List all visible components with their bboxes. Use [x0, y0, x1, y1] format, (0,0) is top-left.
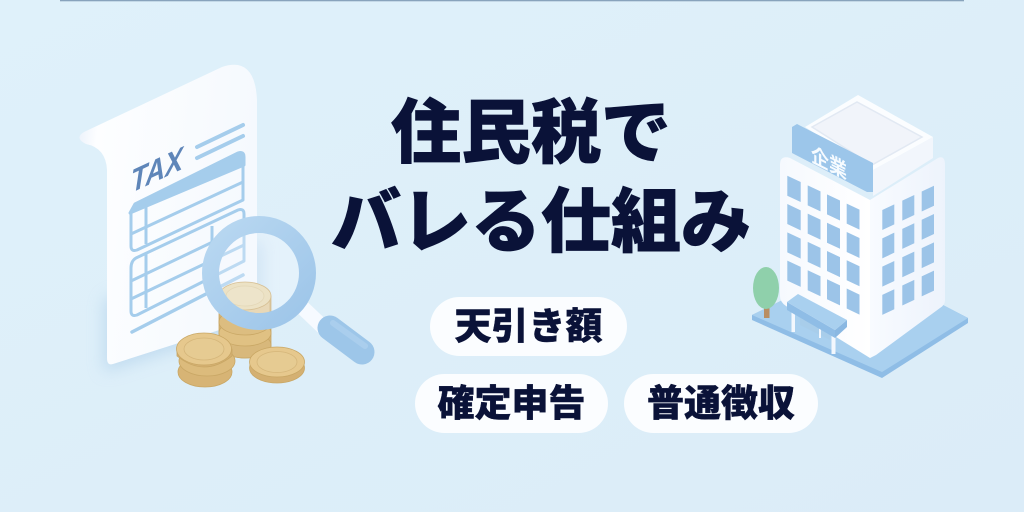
- keyword pill: 天引き額: [430, 297, 627, 356]
- left stack: [178, 357, 232, 387]
- left wall: [780, 157, 870, 358]
- tax document illustration: [79, 65, 262, 372]
- lens glass: [218, 232, 300, 314]
- entrance canopy: [787, 294, 847, 354]
- right windows: [882, 186, 934, 315]
- roof: [805, 95, 933, 196]
- keyword pill: 普通徴収: 普通徴収: [647, 383, 795, 424]
- left windows: [787, 176, 860, 315]
- coins: front stacks: [176, 333, 304, 387]
- tax form tables: [130, 152, 244, 316]
- company sign: 企業: [811, 143, 847, 184]
- keyword pill: 天引き額: 天引き額: [454, 306, 602, 347]
- coins: rear stack: [219, 282, 271, 358]
- tree: [753, 267, 779, 318]
- magnifying glass: [210, 224, 365, 352]
- office building illustration: [752, 95, 968, 378]
- handle grip: [330, 328, 362, 352]
- keyword pill: 普通徴収: [624, 374, 818, 433]
- form bottom line: [132, 275, 243, 332]
- base plate: [752, 262, 968, 378]
- company sign: [792, 124, 873, 192]
- keyword pill: 確定申告: 確定申告: [438, 383, 586, 424]
- title: [331, 94, 751, 261]
- handle connector: [303, 308, 324, 328]
- right wall: [870, 157, 945, 358]
- document header lines: [197, 125, 243, 158]
- lens ring: [210, 224, 308, 322]
- TAX label: TAX: [131, 139, 185, 200]
- title line 1: 住民税で: [391, 94, 671, 172]
- paper sheet: [79, 65, 257, 364]
- keyword pill: 確定申告: [415, 374, 608, 433]
- title line 2: バレる仕組み: [331, 183, 751, 261]
- right stack: [250, 353, 304, 383]
